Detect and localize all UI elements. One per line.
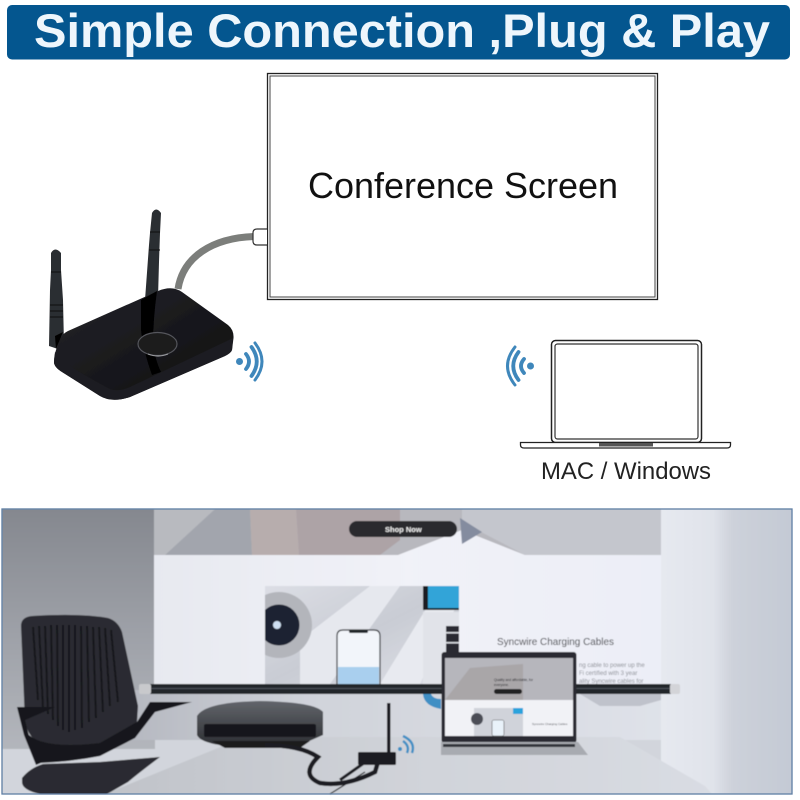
chair back — [21, 615, 138, 751]
laptop label: MAC / Windows — [541, 458, 711, 485]
screen top banner — [154, 509, 661, 555]
photo background: Shop Now — [385, 525, 422, 534]
photo border — [2, 509, 792, 794]
speaker camera — [264, 592, 312, 658]
conference screen — [268, 74, 658, 300]
cable from receiver to screen — [178, 229, 267, 289]
wireless receiver with antennas — [49, 210, 234, 400]
laptop keyboard base — [441, 742, 588, 755]
right antenna — [145, 210, 161, 300]
speakerphone puck — [197, 701, 323, 748]
screen bottom bar — [150, 684, 671, 694]
inset product image — [246, 586, 459, 685]
laptop screen tagline — [494, 678, 534, 687]
icon: wifi signal at laptop — [508, 347, 534, 385]
button ring — [138, 332, 177, 356]
laptop in photo — [441, 652, 588, 755]
right wall — [661, 509, 792, 794]
left wall — [2, 509, 155, 749]
title banner: Simple Connection ,Plug & Play — [34, 5, 771, 58]
desk — [105, 737, 712, 794]
icon: wifi signal at receiver — [236, 343, 262, 380]
laptop screen tagline: everyone. — [494, 683, 509, 687]
syncwire body copy — [579, 663, 645, 685]
small wifi icon — [398, 736, 413, 753]
tablet — [423, 586, 459, 610]
wifi behind laptop — [423, 694, 441, 709]
conference screen: Conference Screen — [308, 165, 618, 206]
chair seat — [22, 757, 160, 794]
icon: laptop — [520, 340, 730, 448]
syncwire heading: Syncwire Charging Cables — [497, 637, 614, 648]
syncwire body copy: ality Syncwire cables for — [579, 679, 643, 685]
bar end caps — [139, 684, 151, 694]
laptop screen tagline: Quality and affordable, for — [494, 678, 534, 682]
syncwire body copy: ng cable to power up the — [579, 663, 645, 669]
syncwire body copy: Fi certified with 3 year — [579, 671, 637, 677]
shop now pill — [349, 521, 457, 537]
small receiver with cable — [265, 703, 396, 794]
laptop screen inner image — [474, 708, 523, 736]
antenna reflection — [141, 291, 161, 375]
receiver body — [54, 288, 234, 400]
left antenna reflection — [55, 332, 63, 349]
chair — [17, 615, 192, 794]
left antenna — [49, 250, 64, 349]
phone — [337, 630, 380, 685]
projection screen — [154, 509, 661, 686]
room photo panel — [2, 509, 792, 794]
laptop in photo: Syncwire Charging Cables — [532, 722, 568, 726]
lower wall under screen — [120, 690, 661, 740]
photo background — [2, 509, 792, 794]
chair armrest — [17, 707, 55, 765]
